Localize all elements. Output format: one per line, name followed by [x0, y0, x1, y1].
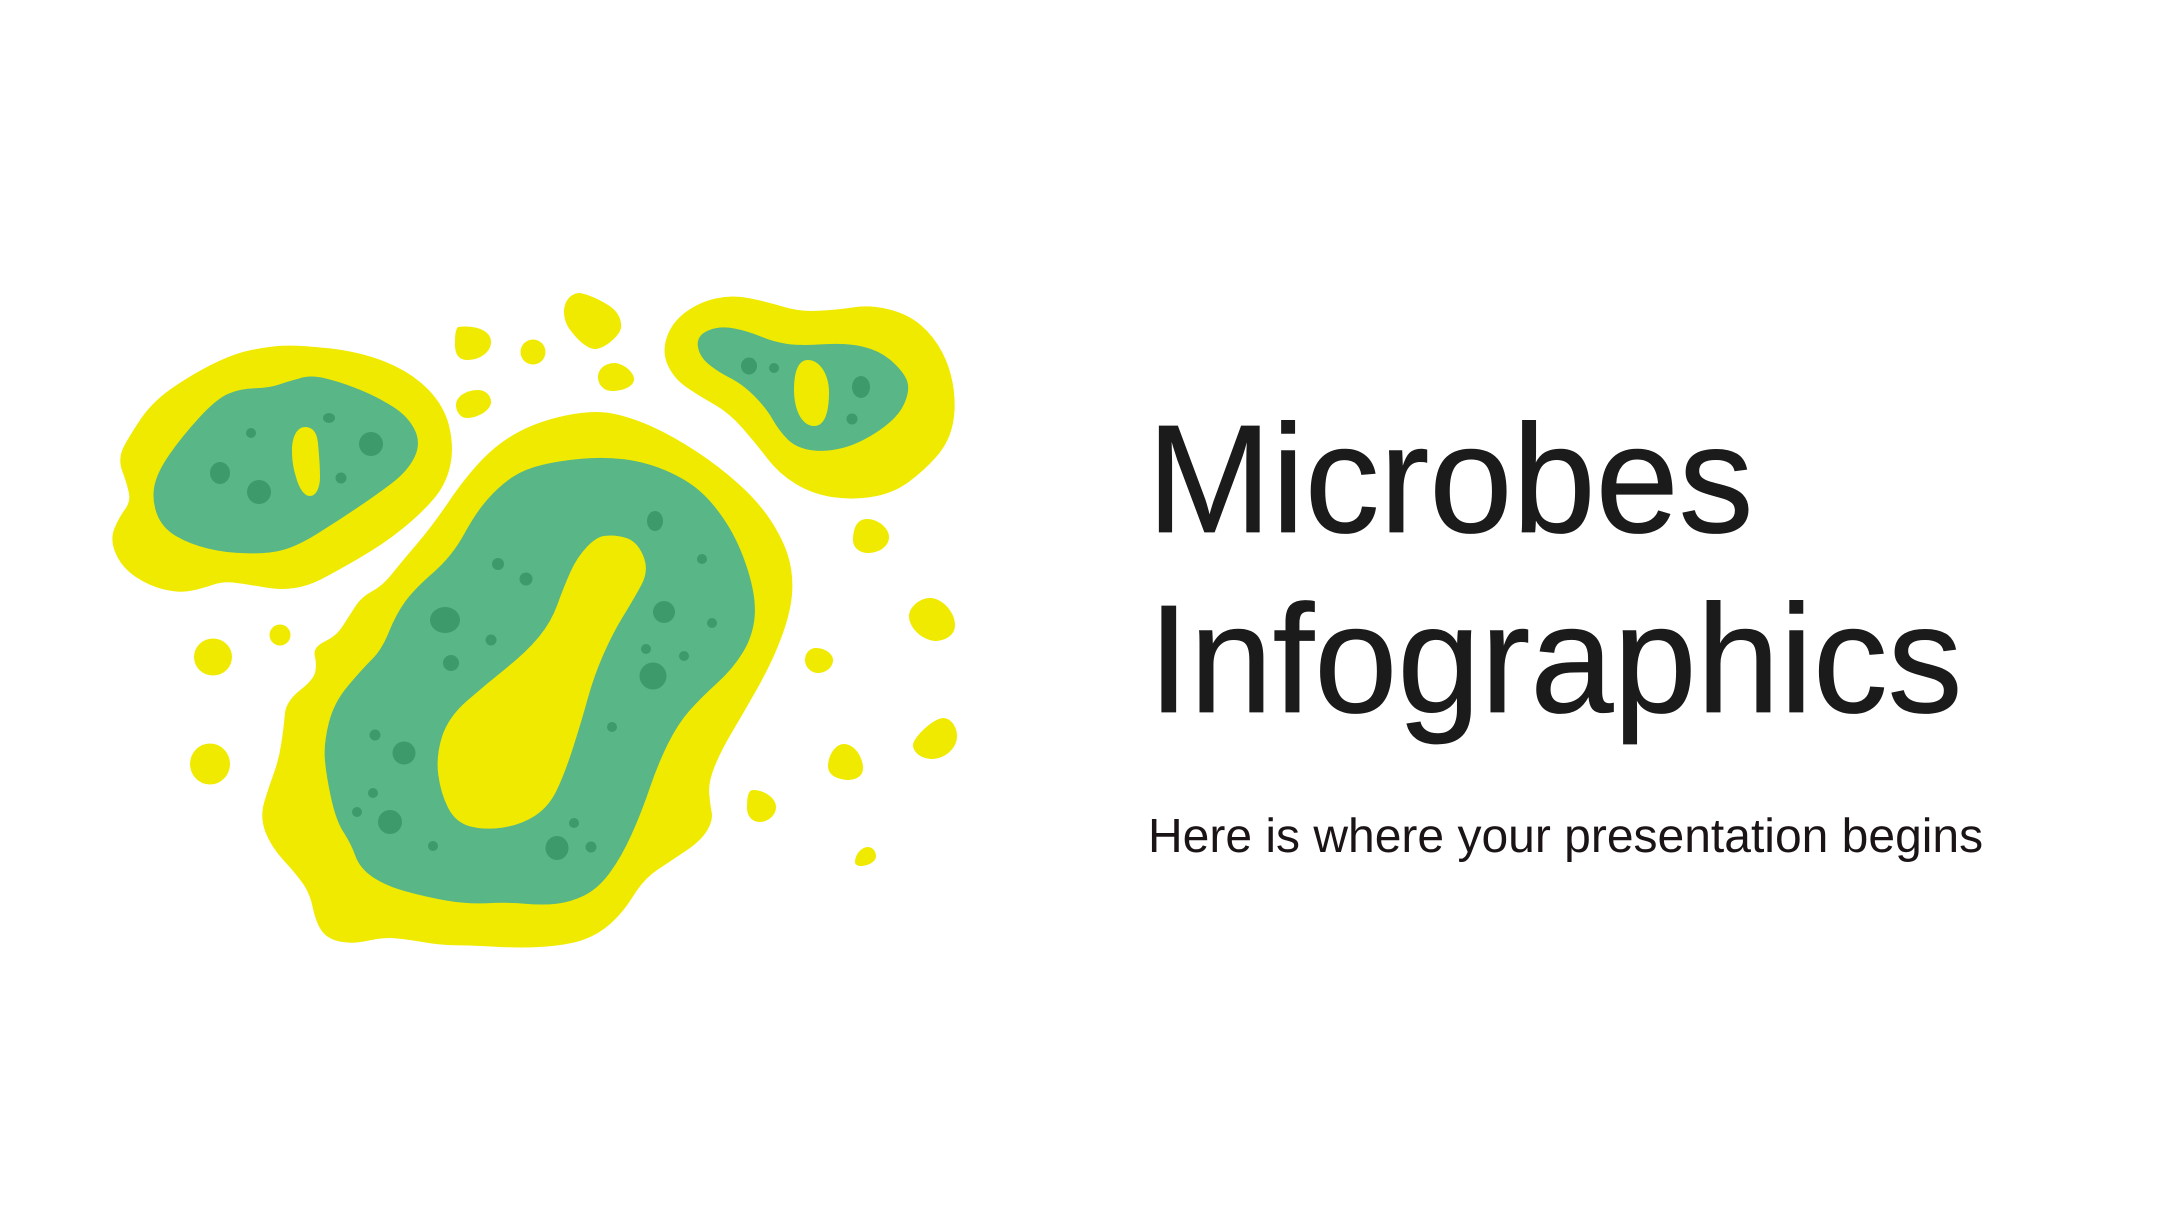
- scattered yellow spores: [190, 293, 957, 866]
- title: Microbes: [1147, 393, 1753, 565]
- microbe: left cell: [114, 347, 451, 591]
- subtitle: Here is where your presentation begins: [1148, 810, 1983, 863]
- title: Infographics: [1148, 573, 1962, 745]
- illustration: microbes: [114, 293, 957, 946]
- microbe: top-right cell: [666, 298, 953, 497]
- title: [1147, 393, 1962, 745]
- microbe: large central cell: [263, 413, 791, 946]
